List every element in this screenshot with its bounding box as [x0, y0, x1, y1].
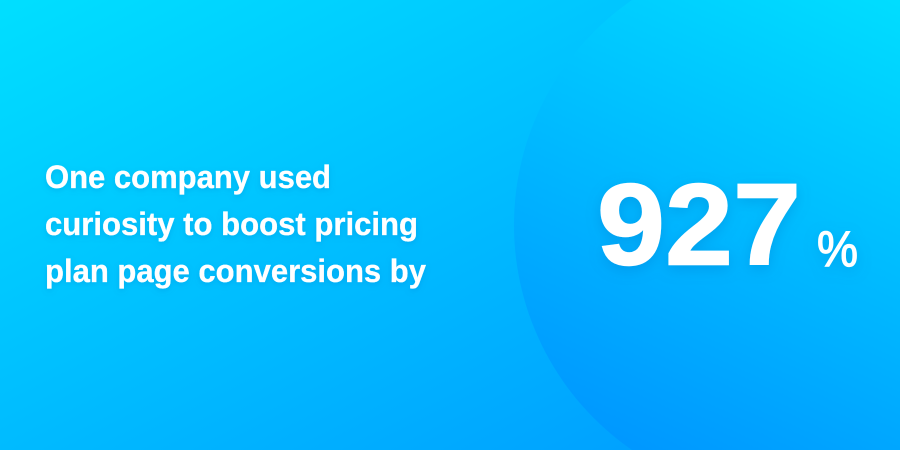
- text block: description: plan page conversions by: [45, 253, 426, 289]
- text block: description: [45, 159, 426, 289]
- decorative circle: [514, 0, 900, 450]
- statistic: 927 percent: 927: [597, 160, 801, 290]
- text block: description: One company used: [45, 159, 331, 195]
- text block: description: curiosity to boost pricing: [45, 206, 418, 242]
- statistic: 927 percent: %: [817, 221, 858, 277]
